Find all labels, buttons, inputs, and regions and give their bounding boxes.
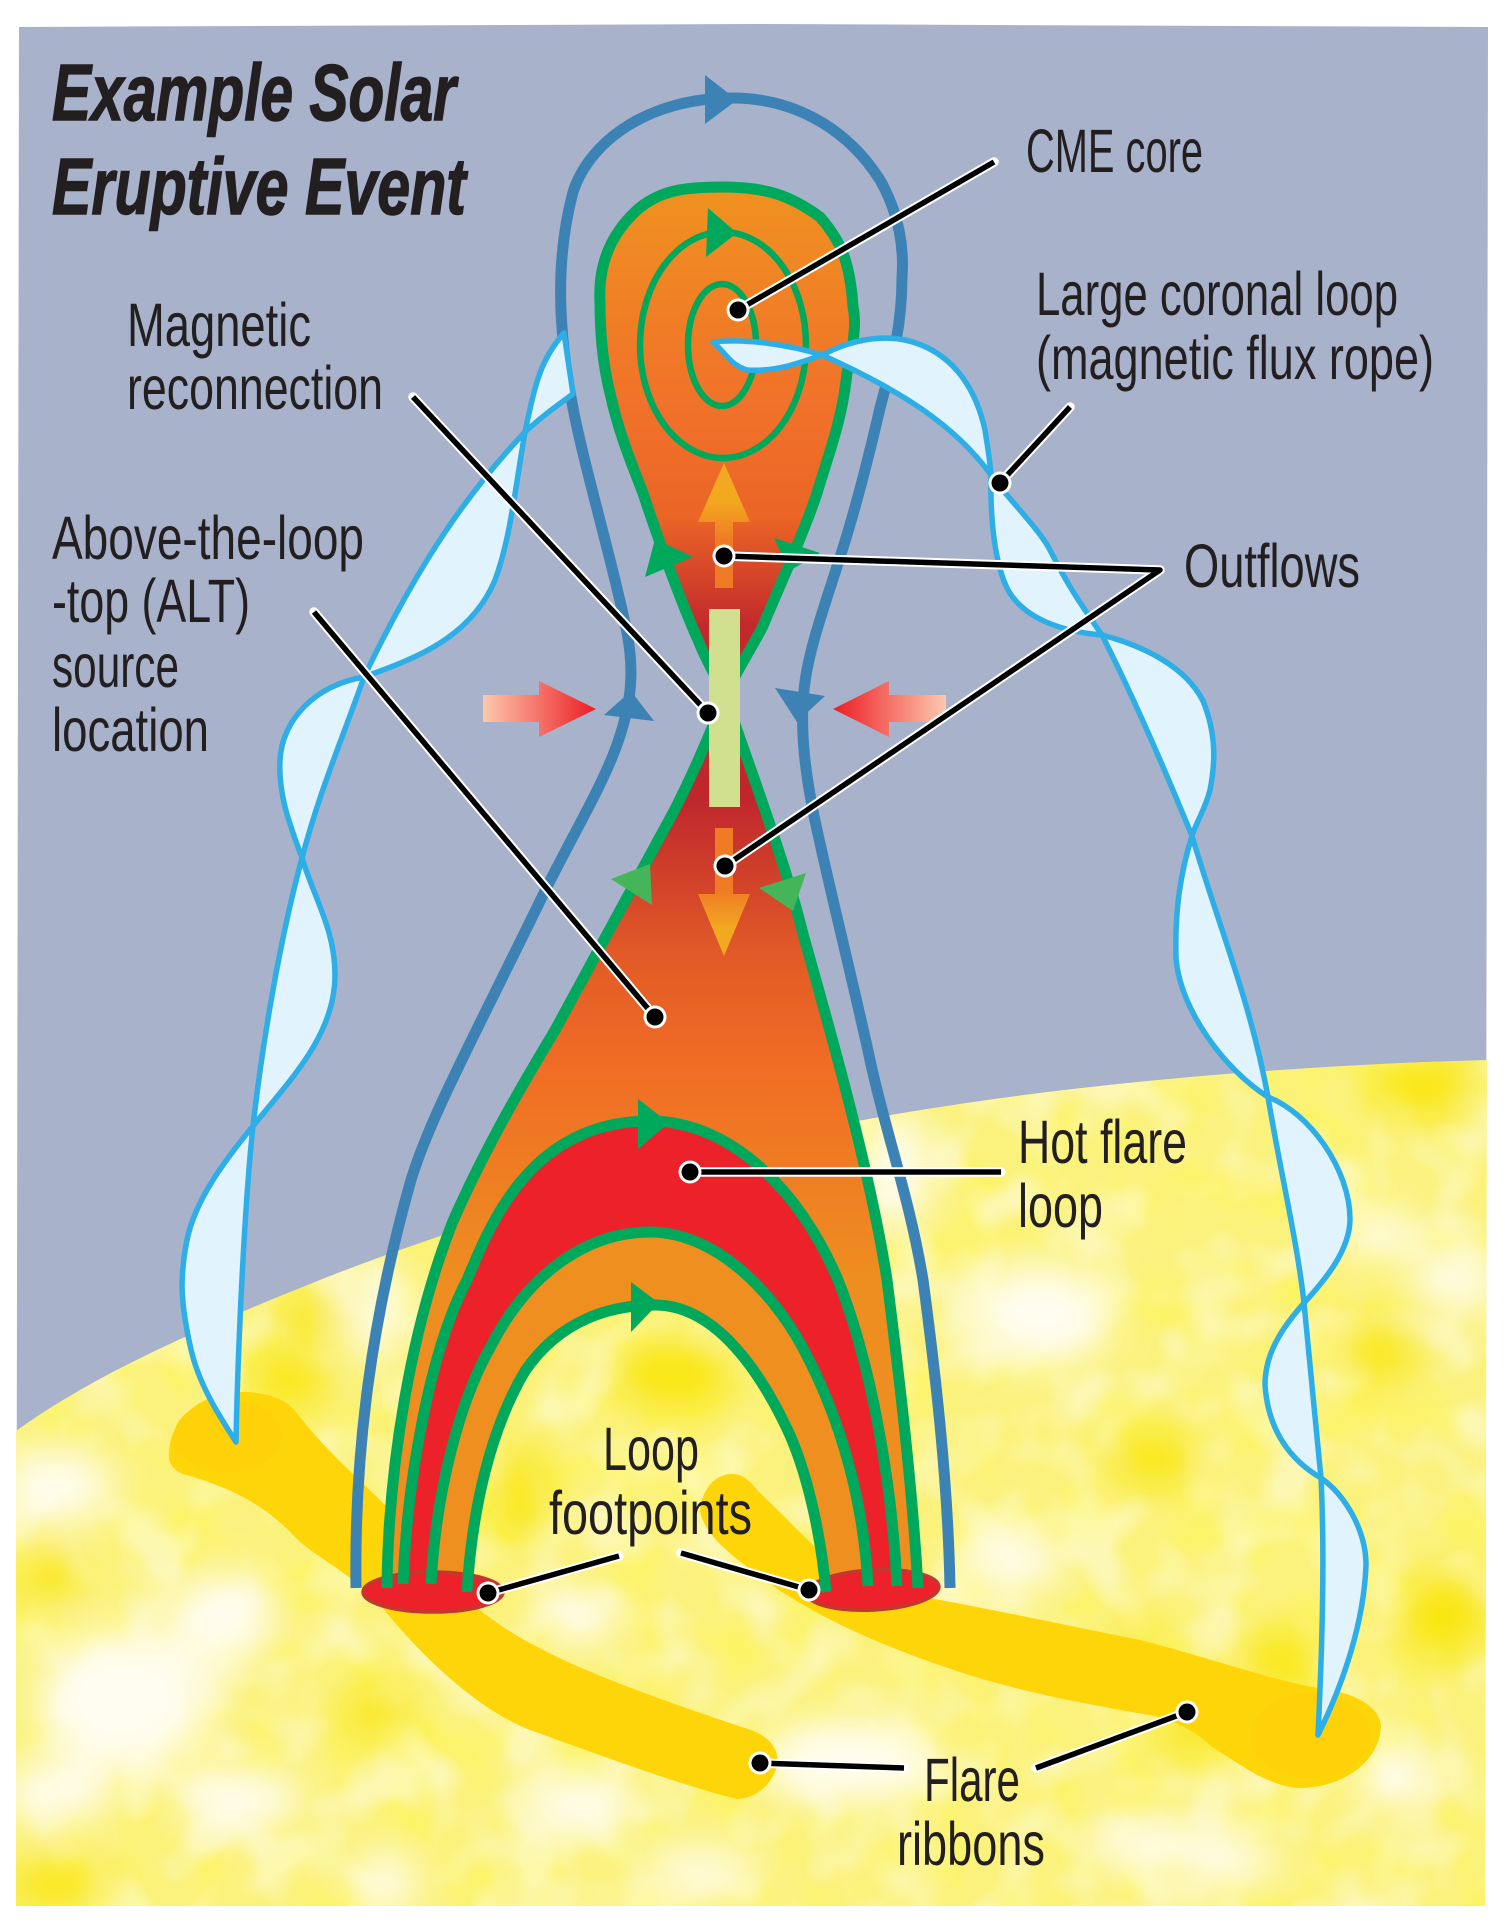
label: above-the-loop-top source location: -top (ALT) <box>52 567 250 635</box>
leader: magnetic reconnection <box>413 397 720 724</box>
label: CME core: CME core <box>1026 117 1203 185</box>
inflow arrow: left <box>483 681 596 737</box>
leader: large coronal loop <box>988 407 1070 494</box>
label: hot flare loop: Hot flare <box>1018 1108 1187 1176</box>
title: Eruptive Event <box>52 142 468 231</box>
leader: loop footpoint right <box>681 1553 820 1602</box>
outer magnetic field line <box>356 98 950 1588</box>
loop footpoint: left <box>363 1572 503 1612</box>
flare ribbon: right <box>700 1474 1381 1788</box>
label: magnetic reconnection: Magnetic <box>127 291 311 359</box>
lower green arrows <box>611 864 806 911</box>
label: above-the-loop-top source location: Above-the-loop <box>52 504 364 572</box>
flame: current sheet and teardrop gradient fill <box>387 187 918 1588</box>
leader: flare ribbon left <box>748 1752 904 1774</box>
green arrows <box>631 208 820 1332</box>
label: above-the-loop-top source location: location <box>52 696 209 764</box>
label: hot flare loop <box>1018 1108 1187 1240</box>
label: loop footpoints: footpoints <box>549 1479 752 1547</box>
label: magnetic reconnection: reconnection <box>127 354 383 422</box>
label: flare ribbons: ribbons <box>897 1810 1045 1878</box>
leader: hot flare loop <box>678 1160 1001 1184</box>
label: large coronal loop <box>1036 260 1434 392</box>
blue field arrows <box>604 75 825 722</box>
leader: outflows <box>712 544 1160 878</box>
label: flare ribbons: Flare <box>924 1746 1020 1814</box>
flare loop: orange band <box>403 1121 897 1586</box>
leader: flare ribbon right <box>1036 1700 1198 1768</box>
outflow arrow: down <box>698 828 750 956</box>
leader: loop footpoint left <box>476 1556 619 1604</box>
label: above-the-loop-top source location <box>52 504 364 764</box>
title: Example Solar <box>52 48 459 137</box>
reconnection region bar <box>709 609 740 807</box>
leader: CME core <box>726 162 994 322</box>
label: above-the-loop-top source location: source <box>52 632 179 700</box>
label: magnetic reconnection <box>127 291 383 422</box>
label: flare ribbons <box>897 1746 1045 1878</box>
title <box>52 48 468 231</box>
outflow arrow: up <box>698 463 750 588</box>
hot flare loop: red band <box>403 1121 897 1586</box>
flare ribbon: left <box>169 1392 778 1799</box>
label: loop footpoints <box>549 1415 752 1547</box>
CME core spiral <box>640 232 806 458</box>
label: loop footpoints: Loop <box>603 1415 699 1483</box>
inflow arrow: right <box>833 681 946 737</box>
loop footpoint: right <box>806 1567 940 1613</box>
panel: solar surface <box>0 1040 1510 1920</box>
magnetic flux rope <box>182 333 1366 1735</box>
label: outflows: Outflows <box>1184 532 1360 600</box>
leader: above-the-loop-top source <box>314 612 666 1028</box>
green field lines <box>387 187 918 1592</box>
label: hot flare loop: loop <box>1018 1172 1103 1240</box>
